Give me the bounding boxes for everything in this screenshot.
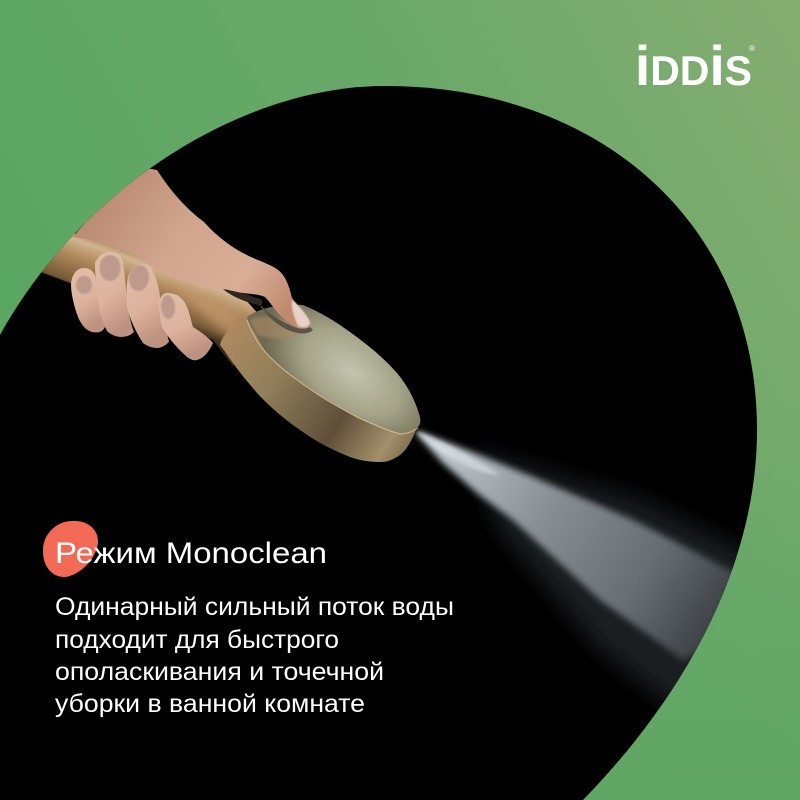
description text: подходит для быстрого xyxy=(55,626,339,654)
face rim highlight xyxy=(247,320,418,434)
description text: уборки в ванной комнате xyxy=(55,690,365,718)
finger 4 xyxy=(159,293,213,360)
thumb nail xyxy=(292,300,310,327)
shower handle xyxy=(30,233,262,366)
heading: Режим Monoclean xyxy=(55,537,327,570)
shower button xyxy=(223,289,262,305)
shower head face xyxy=(247,305,420,433)
handle highlight near head xyxy=(186,295,240,337)
finger 3 xyxy=(126,264,169,348)
description text: Одинарный сильный поток воды xyxy=(55,593,454,621)
fingers xyxy=(71,252,213,360)
face warm sheen xyxy=(249,316,305,338)
finger 2 xyxy=(95,252,134,337)
iDDiS logo: iDDiS xyxy=(635,34,752,97)
water spray jet xyxy=(417,431,760,720)
finger 1 xyxy=(71,268,105,332)
hand: palm and thumb xyxy=(73,168,310,328)
description text xyxy=(55,593,454,718)
registered mark: ® xyxy=(749,44,755,53)
fingernails xyxy=(76,255,176,320)
shower head rim xyxy=(220,317,420,462)
button ring xyxy=(259,304,313,333)
coral accent blob xyxy=(43,521,98,577)
description text: ополаскивания и точечной xyxy=(55,658,384,686)
